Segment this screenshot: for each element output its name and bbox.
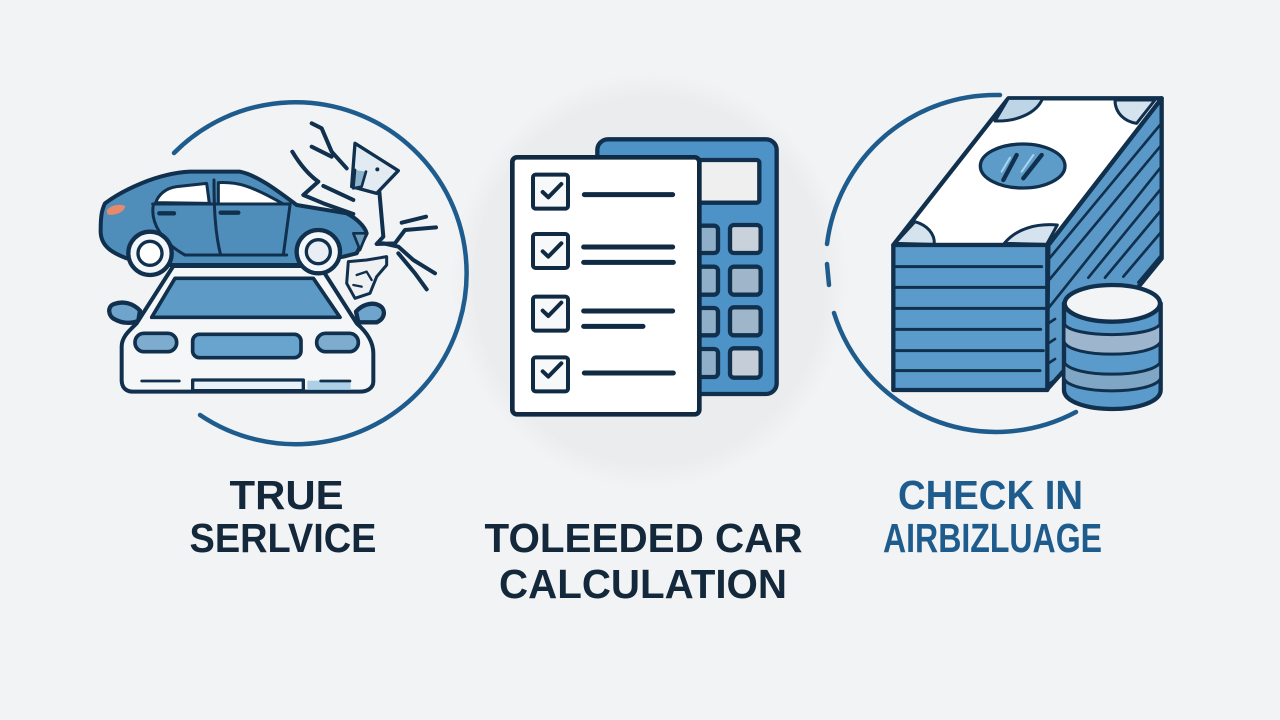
heading: check in airbizluage: CHECK IN <box>898 472 1083 518</box>
icon ring: check in <box>827 95 1076 432</box>
side-view blue car <box>101 172 367 275</box>
panel: check in airbizluage <box>827 95 1162 561</box>
icon: money stack and coins <box>893 98 1162 409</box>
front-view white car <box>109 266 384 392</box>
heading: check in airbizluage: AIRBIZLUAGE <box>883 515 1102 561</box>
checklist paper <box>512 157 699 414</box>
icon: crashed cars <box>101 123 436 392</box>
calculator <box>597 139 777 394</box>
coin stack <box>1064 285 1161 409</box>
heading: true service <box>190 472 376 561</box>
heading: true service: TRUE <box>230 472 344 518</box>
heading: toleeded car calculation: TOLEEDED CAR <box>484 515 802 561</box>
heading: true service: SERLVICE <box>190 515 376 561</box>
heading: toleeded car calculation: CALCULATION <box>499 561 787 607</box>
heading: toleeded car calculation <box>484 515 802 607</box>
panel: true service <box>101 102 467 561</box>
banknote stack <box>893 98 1162 390</box>
crash debris <box>292 123 436 298</box>
icon ring: true service <box>174 102 467 444</box>
heading: check in airbizluage <box>883 472 1102 561</box>
icon: checklist and calculator <box>512 139 777 414</box>
panel: toleeded car calculation <box>484 139 802 607</box>
